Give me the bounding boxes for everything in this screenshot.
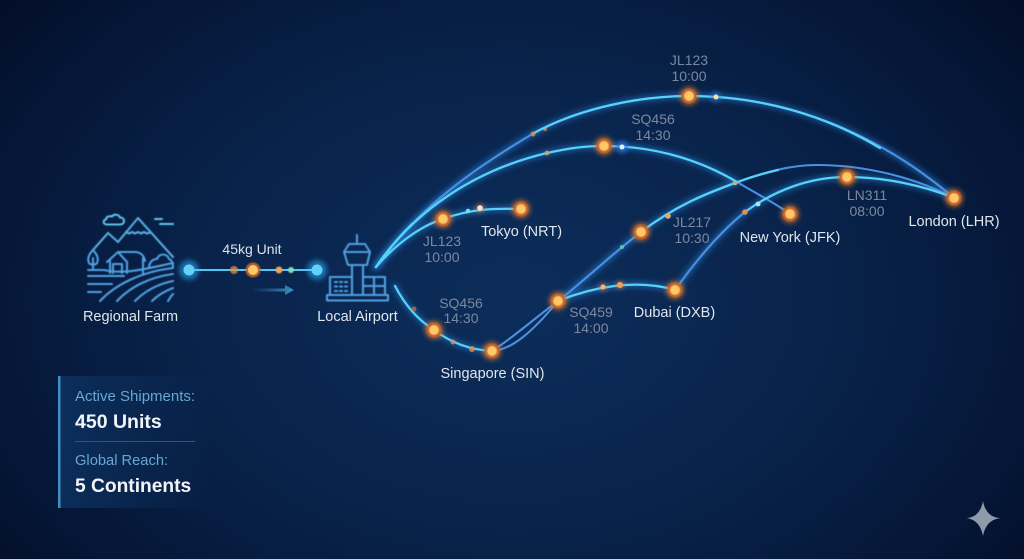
flight: LN311: LN311 — [847, 187, 887, 203]
node: Dubai — [666, 280, 684, 300]
node: New York arc — [594, 136, 614, 156]
label: regional farm: Regional Farm — [83, 309, 178, 325]
label: local airport: Local Airport — [317, 309, 398, 325]
label: unit weight: 45kg Unit — [222, 241, 282, 257]
label: Tokyo: Tokyo (NRT) — [481, 224, 562, 240]
node: Tokyo leg — [434, 210, 452, 228]
flight: LN311: 08:00 — [849, 203, 885, 219]
label: London: London (LHR) — [908, 214, 1000, 230]
icon: local airport — [327, 235, 388, 300]
flight: SQ456 Singapore: 14:30 — [443, 310, 479, 326]
label: Singapore: Singapore (SIN) — [441, 366, 544, 382]
icon: regional farm — [88, 215, 173, 301]
node: London top arc — [680, 86, 698, 106]
route glow — [376, 96, 954, 351]
node: transfer hub — [548, 292, 568, 310]
flight: JL123 top: 10:00 — [671, 68, 707, 84]
flight: SQ459: 14:00 — [573, 320, 609, 336]
node: London — [944, 188, 964, 208]
arrow: direction of travel — [252, 285, 294, 295]
flight: JL123 Tokyo: JL123 — [423, 233, 461, 249]
node: Singapore leg — [424, 320, 444, 340]
node: Singapore — [482, 342, 502, 360]
flight routes — [376, 96, 954, 351]
flight labels — [423, 52, 887, 336]
route: hub to London — [558, 165, 954, 301]
flight: JL217: 10:30 — [674, 230, 710, 246]
node: LN311 leg — [838, 168, 856, 186]
route: airport to Singapore — [395, 286, 492, 351]
small transit dots — [412, 92, 760, 352]
node: New York — [780, 204, 800, 224]
flight: SQ459: SQ459 — [569, 304, 613, 320]
flight: SQ456 top: 14:30 — [635, 127, 671, 143]
city labels — [441, 214, 1000, 382]
route: Dubai to London — [675, 177, 954, 290]
flight: JL123 top: JL123 — [670, 52, 708, 68]
route: airport to Tokyo — [376, 209, 521, 267]
unit transfer line — [179, 260, 327, 280]
flight: SQ456 top: SQ456 — [631, 111, 675, 127]
label: New York: New York (JFK) — [740, 230, 840, 246]
route: hub to Dubai — [558, 285, 675, 301]
route: airport to New York — [376, 146, 790, 267]
label: Dubai: Dubai (DXB) — [634, 305, 715, 321]
flight: JL217: JL217 — [673, 214, 711, 230]
node: JL217 leg — [632, 222, 650, 242]
route: Singapore to hub — [492, 301, 558, 351]
icon: sparkle watermark — [966, 501, 1001, 536]
node: Tokyo — [512, 200, 530, 218]
stat label: active shipments: Active Shipments: — [75, 388, 195, 405]
flight: JL123 Tokyo: 10:00 — [424, 249, 460, 265]
flight: SQ456 Singapore: SQ456 — [439, 295, 483, 311]
stat value: continents: 5 Continents — [75, 476, 191, 497]
stat label: global reach: Global Reach: — [75, 453, 168, 469]
airport nodes — [424, 86, 964, 360]
panel: shipment stats — [58, 376, 213, 508]
stat value: units: 450 Units — [75, 411, 162, 433]
route: airport to London — [376, 96, 954, 267]
